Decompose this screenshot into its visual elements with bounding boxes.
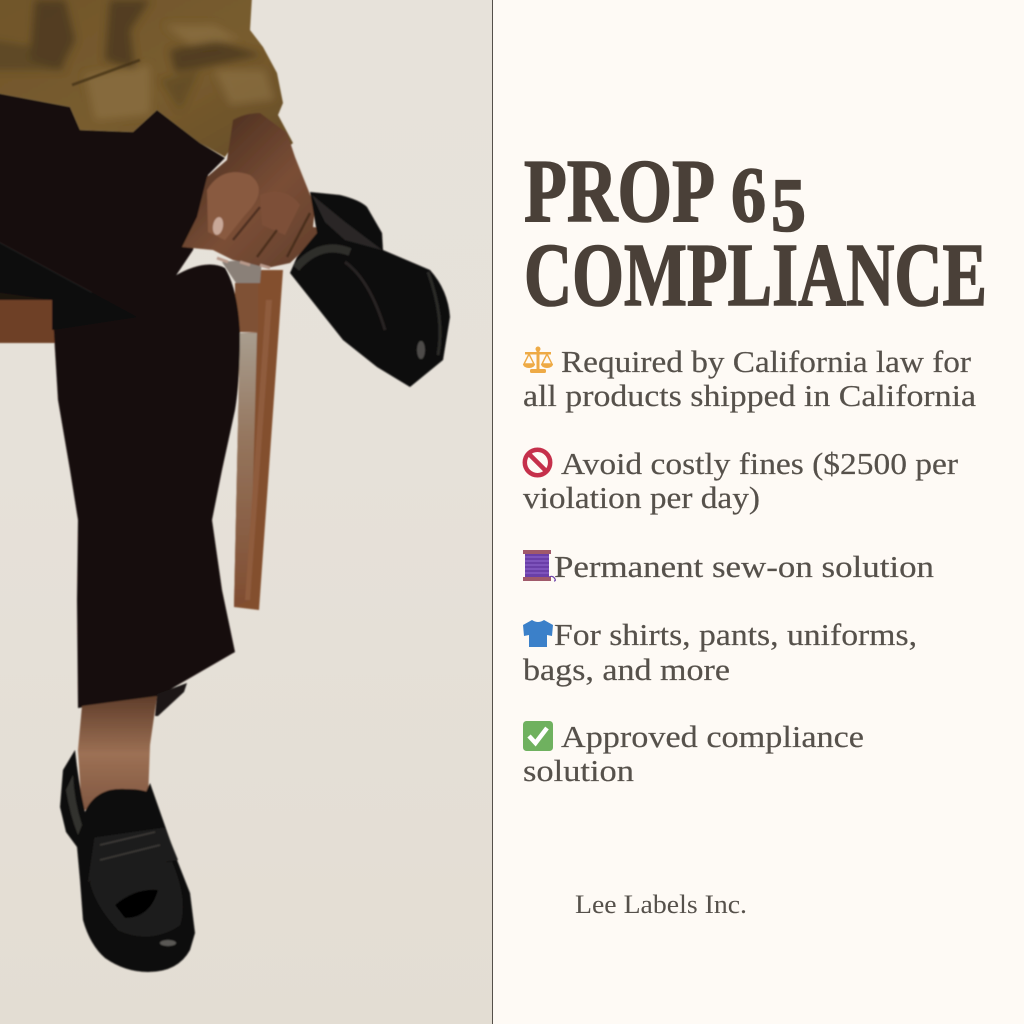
shirt <box>0 0 293 157</box>
shirt folds <box>0 0 262 110</box>
shirt creases <box>72 60 140 85</box>
icon: scales <box>523 346 553 373</box>
hand <box>181 113 318 270</box>
photo edge line <box>492 0 493 1024</box>
bullet: garments: For shirts, pants, uniforms, <box>554 617 917 652</box>
shirt highlights <box>85 25 275 120</box>
chair <box>0 258 283 610</box>
bullet: approved <box>523 719 864 788</box>
icon: prohibited <box>525 450 550 475</box>
panel: text background <box>492 0 1024 1024</box>
bullet: garments: bags, and more <box>523 652 730 687</box>
bullet: California law: all products shipped in California <box>523 378 976 413</box>
title: 6 <box>731 151 766 238</box>
lower loafer <box>60 750 195 972</box>
bullet: fines <box>523 446 959 515</box>
title <box>524 142 987 325</box>
seated figure and chair <box>0 0 450 972</box>
bullet: fines: Avoid costly fines ($2500 per <box>561 446 959 481</box>
bullet: sew-on: Permanent sew-on solution <box>554 549 935 584</box>
bullet: garments <box>523 617 917 687</box>
bullet: approved: solution <box>523 753 635 788</box>
icon: thread spool <box>523 550 555 581</box>
upper thigh trousers <box>0 90 225 317</box>
panel: photo of seated person in loafers <box>0 0 492 1024</box>
under leg shadow <box>0 232 137 330</box>
lower ankle <box>78 696 157 812</box>
bullet: California law: Required by California law for <box>561 344 972 379</box>
raised loafer <box>290 192 450 387</box>
icon: t-shirt <box>523 620 553 647</box>
title: PROP <box>524 142 715 241</box>
company name: Lee Labels Inc. <box>575 890 747 919</box>
lower leg trousers <box>52 265 240 708</box>
bullet: approved: Approved compliance <box>561 719 864 754</box>
icon: check mark <box>523 721 553 751</box>
trouser cuff fold <box>155 683 187 716</box>
bullet: fines: violation per day) <box>523 480 760 515</box>
bullet: California law <box>523 344 976 413</box>
title: 5 <box>771 164 806 248</box>
